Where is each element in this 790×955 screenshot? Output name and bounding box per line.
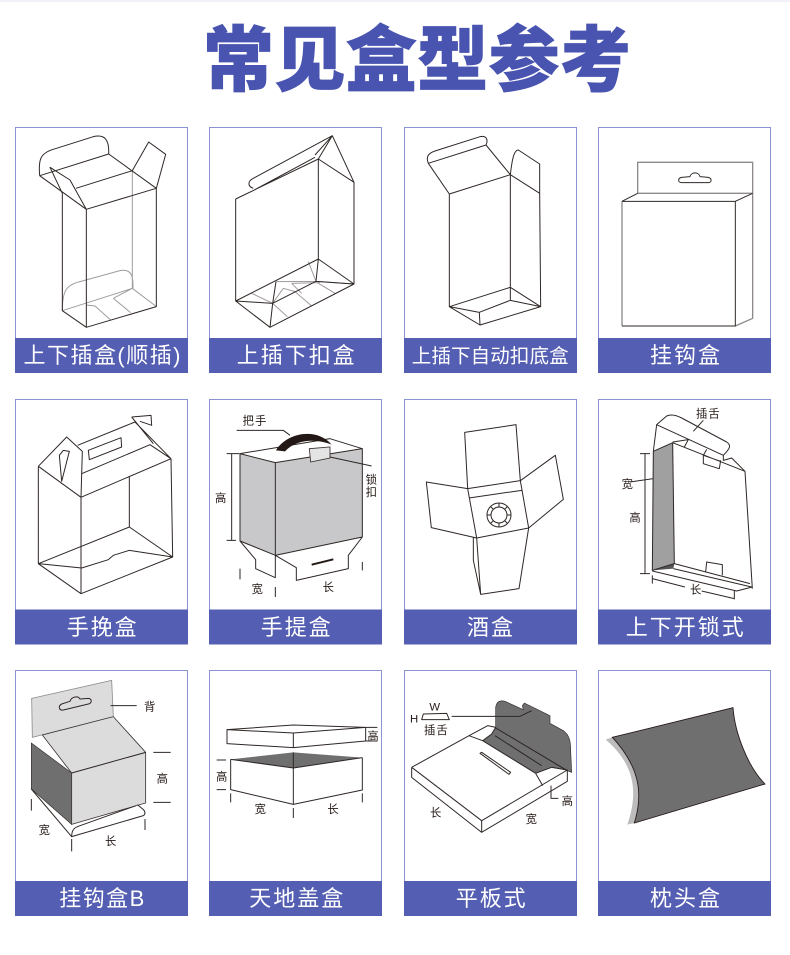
panel: 天地盖盒	[209, 670, 382, 916]
annotation: 高: 高	[215, 491, 226, 505]
annotation: 锁: 锁	[366, 473, 377, 487]
label: 上下开锁式: 上下开锁式	[626, 615, 744, 640]
annotation: 背: 背	[144, 700, 155, 714]
annotation: 长: 长	[105, 835, 116, 848]
label: 平板式: 平板式	[456, 886, 526, 911]
annotation: 插舌: 插舌	[696, 407, 721, 421]
panel: 上插下自动扣底盒	[404, 128, 577, 373]
panel: 上插下扣盒	[209, 128, 382, 373]
label: 挂钩盒B: 挂钩盒B	[59, 886, 144, 911]
panel: 手挽盒	[15, 400, 188, 644]
label: 手挽盒: 手挽盒	[67, 615, 137, 640]
icon: pillow box	[606, 708, 765, 825]
icon: lid and base box	[216, 725, 379, 818]
annotation: 长: 长	[690, 584, 701, 597]
annotation: 把手: 把手	[243, 414, 267, 428]
title: 常见盒型参考	[203, 22, 631, 101]
label: 挂钩盒: 挂钩盒	[650, 343, 720, 368]
icon: snap-bottom box	[236, 136, 354, 327]
annotation: 高: 高	[629, 510, 641, 524]
panel: 上下插盒(顺插)	[15, 128, 188, 373]
icon: gable handle box	[38, 415, 173, 594]
annotation: 高 base: 高	[216, 770, 227, 784]
annotation: 扣: 扣	[366, 485, 377, 499]
icon: wine box net	[426, 425, 563, 594]
annotation: 插舌: 插舌	[424, 723, 449, 737]
annotation: 宽: 宽	[526, 812, 537, 826]
label: 上插下自动扣底盒: 上插下自动扣底盒	[412, 346, 569, 368]
label: 天地盖盒: 天地盖盒	[249, 886, 343, 911]
panel: 平板式	[404, 670, 577, 916]
annotation: W: W	[429, 702, 440, 714]
label: 酒盒: 酒盒	[467, 615, 513, 640]
annotation: H: H	[410, 713, 418, 725]
panel: 手提盒	[209, 400, 382, 644]
annotation: 宽: 宽	[622, 477, 633, 491]
icon: hanging box B	[31, 680, 171, 851]
label: 上下插盒(顺插): 上下插盒(顺插)	[24, 343, 180, 368]
icon: hanging box	[622, 162, 753, 326]
annotation: 高: 高	[562, 794, 573, 808]
icon: carry box with handle	[215, 414, 377, 597]
label: 手提盒: 手提盒	[261, 615, 331, 640]
annotation: 宽: 宽	[255, 802, 266, 816]
annotation: 长: 长	[327, 803, 339, 816]
annotation: 高: 高	[157, 771, 168, 785]
icon: top-bottom lock box	[622, 407, 752, 599]
label: 枕头盒: 枕头盒	[650, 886, 720, 911]
annotation: 宽: 宽	[252, 582, 263, 596]
panel: 枕头盒	[598, 670, 771, 916]
annotation: 宽: 宽	[39, 823, 50, 837]
annotation: 长: 长	[323, 581, 334, 594]
panel: 酒盒	[404, 400, 577, 644]
icon: auto-lock bottom box	[427, 136, 541, 325]
panel: 挂钩盒B	[15, 670, 188, 916]
annotation: 长: 长	[430, 807, 441, 820]
panel: 上下开锁式	[598, 400, 771, 644]
icon: tuck box	[39, 136, 166, 327]
panel: 挂钩盒	[598, 128, 771, 373]
label: 上插下扣盒: 上插下扣盒	[237, 343, 355, 368]
icon: flat box	[410, 701, 573, 832]
annotation: 高 lid: 高	[367, 729, 379, 743]
